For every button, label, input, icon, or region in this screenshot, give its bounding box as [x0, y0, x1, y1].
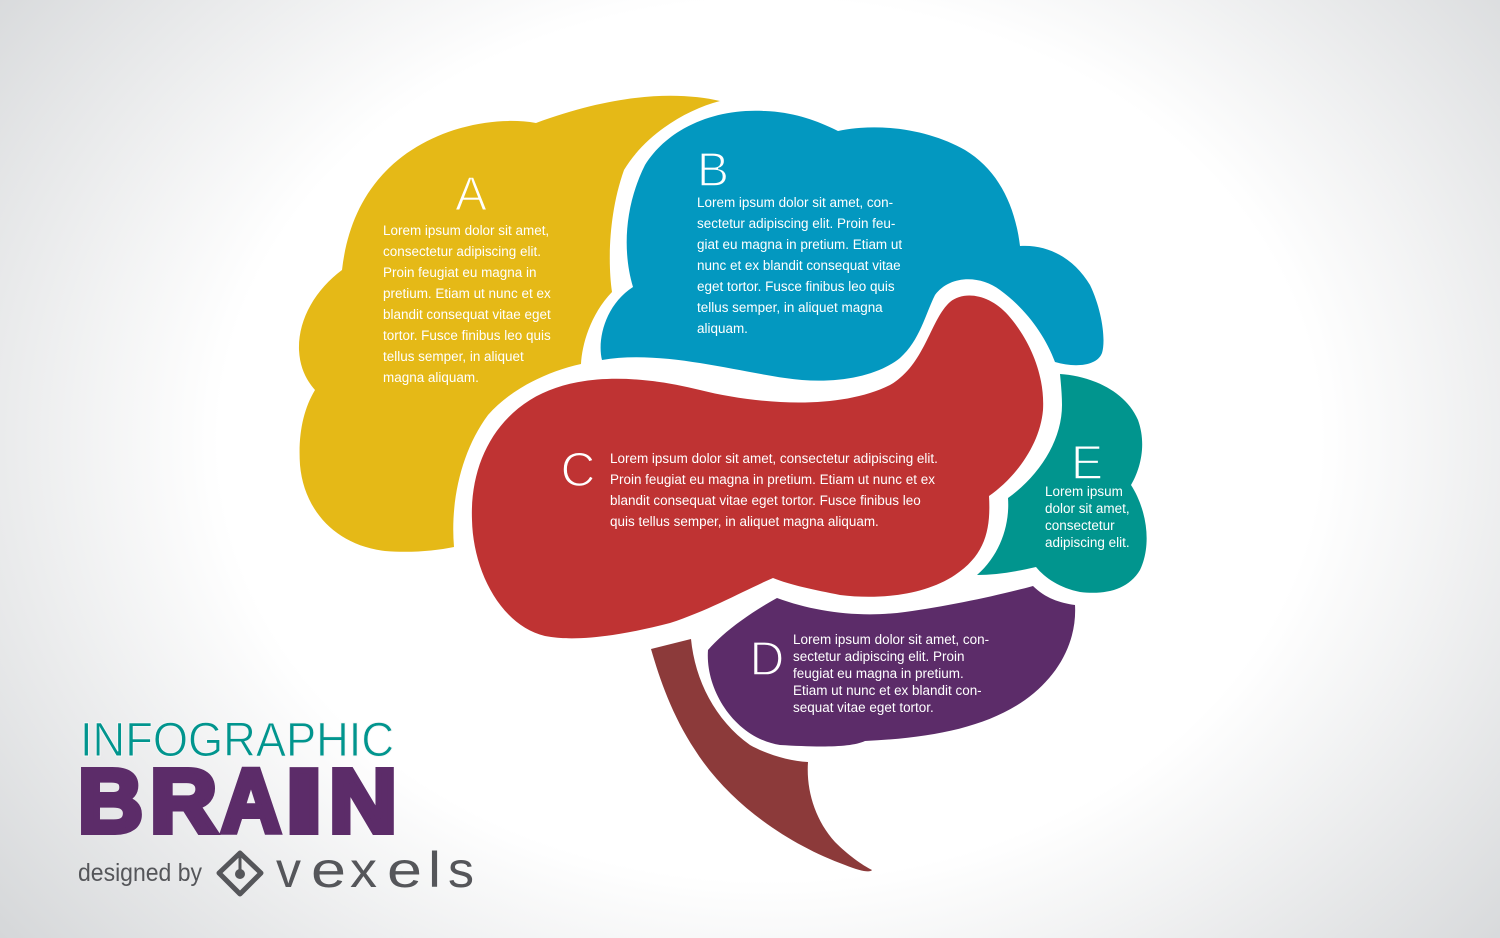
- lobe B: blue: [601, 111, 1104, 381]
- text B: aliquam.: [697, 321, 748, 336]
- title: BRAIN: R: [150, 752, 217, 852]
- text E: consectetur: [1045, 518, 1115, 533]
- lobe E: teal: [977, 374, 1147, 593]
- text B: tellus semper, in aliquet magna: [697, 300, 883, 315]
- label E: E: [1071, 437, 1103, 490]
- brain stem: [651, 639, 872, 871]
- lobe C: red: [472, 296, 1043, 638]
- brain diagram: [299, 96, 1147, 871]
- text A: Lorem ipsum dolor sit amet,: [383, 223, 549, 238]
- text B: eget tortor. Fusce finibus leo quis: [697, 279, 895, 294]
- title: BRAIN: N: [329, 752, 397, 852]
- wordmark: vexels: l: [428, 842, 441, 898]
- label A: A: [455, 168, 487, 221]
- title: BRAIN: B: [78, 752, 143, 852]
- icon: vexels logo: [219, 853, 261, 894]
- text C: Lorem ipsum dolor sit amet, consectetur adipiscing elit.: [610, 451, 938, 466]
- text D: sequat vitae eget tortor.: [793, 700, 934, 715]
- text D: Etiam ut nunc et ex blandit con-: [793, 683, 982, 698]
- text B: Lorem ipsum dolor sit amet, con-: [697, 195, 893, 210]
- text D: feugiat eu magna in pretium.: [793, 666, 964, 681]
- wordmark: vexels: v: [276, 842, 301, 898]
- wordmark: vexels: e: [387, 842, 422, 898]
- text C: blandit consequat vitae eget tortor. Fusce finibus leo: [610, 493, 921, 508]
- wordmark: vexels: e: [311, 842, 346, 898]
- title: INFOGRAPHIC: INFOGRAPHIC: [80, 714, 394, 767]
- text A: pretium. Etiam ut nunc et ex: [383, 286, 551, 301]
- text E: adipiscing elit.: [1045, 535, 1130, 550]
- text A: magna aliquam.: [383, 370, 479, 385]
- text A: consectetur adipiscing elit.: [383, 244, 541, 259]
- wordmark: vexels: x: [350, 842, 377, 898]
- text B: giat eu magna in pretium. Etiam ut: [697, 237, 902, 252]
- text E: Lorem ipsum: [1045, 484, 1123, 499]
- title: BRAIN: A: [221, 752, 281, 852]
- text C: Proin feugiat eu magna in pretium. Etiam ut nunc et ex: [610, 472, 935, 487]
- wordmark: vexels: s: [448, 842, 474, 898]
- text C: quis tellus semper, in aliquet magna aliquam.: [610, 514, 879, 529]
- text A: Proin feugiat eu magna in: [383, 265, 536, 280]
- text A: tellus semper, in aliquet: [383, 349, 524, 364]
- label D: D: [750, 633, 784, 686]
- label C: C: [561, 444, 595, 497]
- text A: blandit consequat vitae eget: [383, 307, 551, 322]
- text D: Lorem ipsum dolor sit amet, con-: [793, 632, 989, 647]
- title: BRAIN: I: [285, 752, 323, 852]
- label B: B: [697, 144, 729, 197]
- wordmark: vexels: [276, 842, 474, 898]
- credit: designed by: designed by: [78, 859, 202, 887]
- text A: tortor. Fusce finibus leo quis: [383, 328, 551, 343]
- text E: dolor sit amet,: [1045, 501, 1130, 516]
- lobe D: purple: [708, 586, 1075, 746]
- text B: sectetur adipiscing elit. Proin feu-: [697, 216, 895, 231]
- title: BRAIN: [78, 752, 397, 852]
- text B: nunc et ex blandit consequat vitae: [697, 258, 901, 273]
- text D: sectetur adipiscing elit. Proin: [793, 649, 964, 664]
- lobe A: yellow: [299, 96, 720, 552]
